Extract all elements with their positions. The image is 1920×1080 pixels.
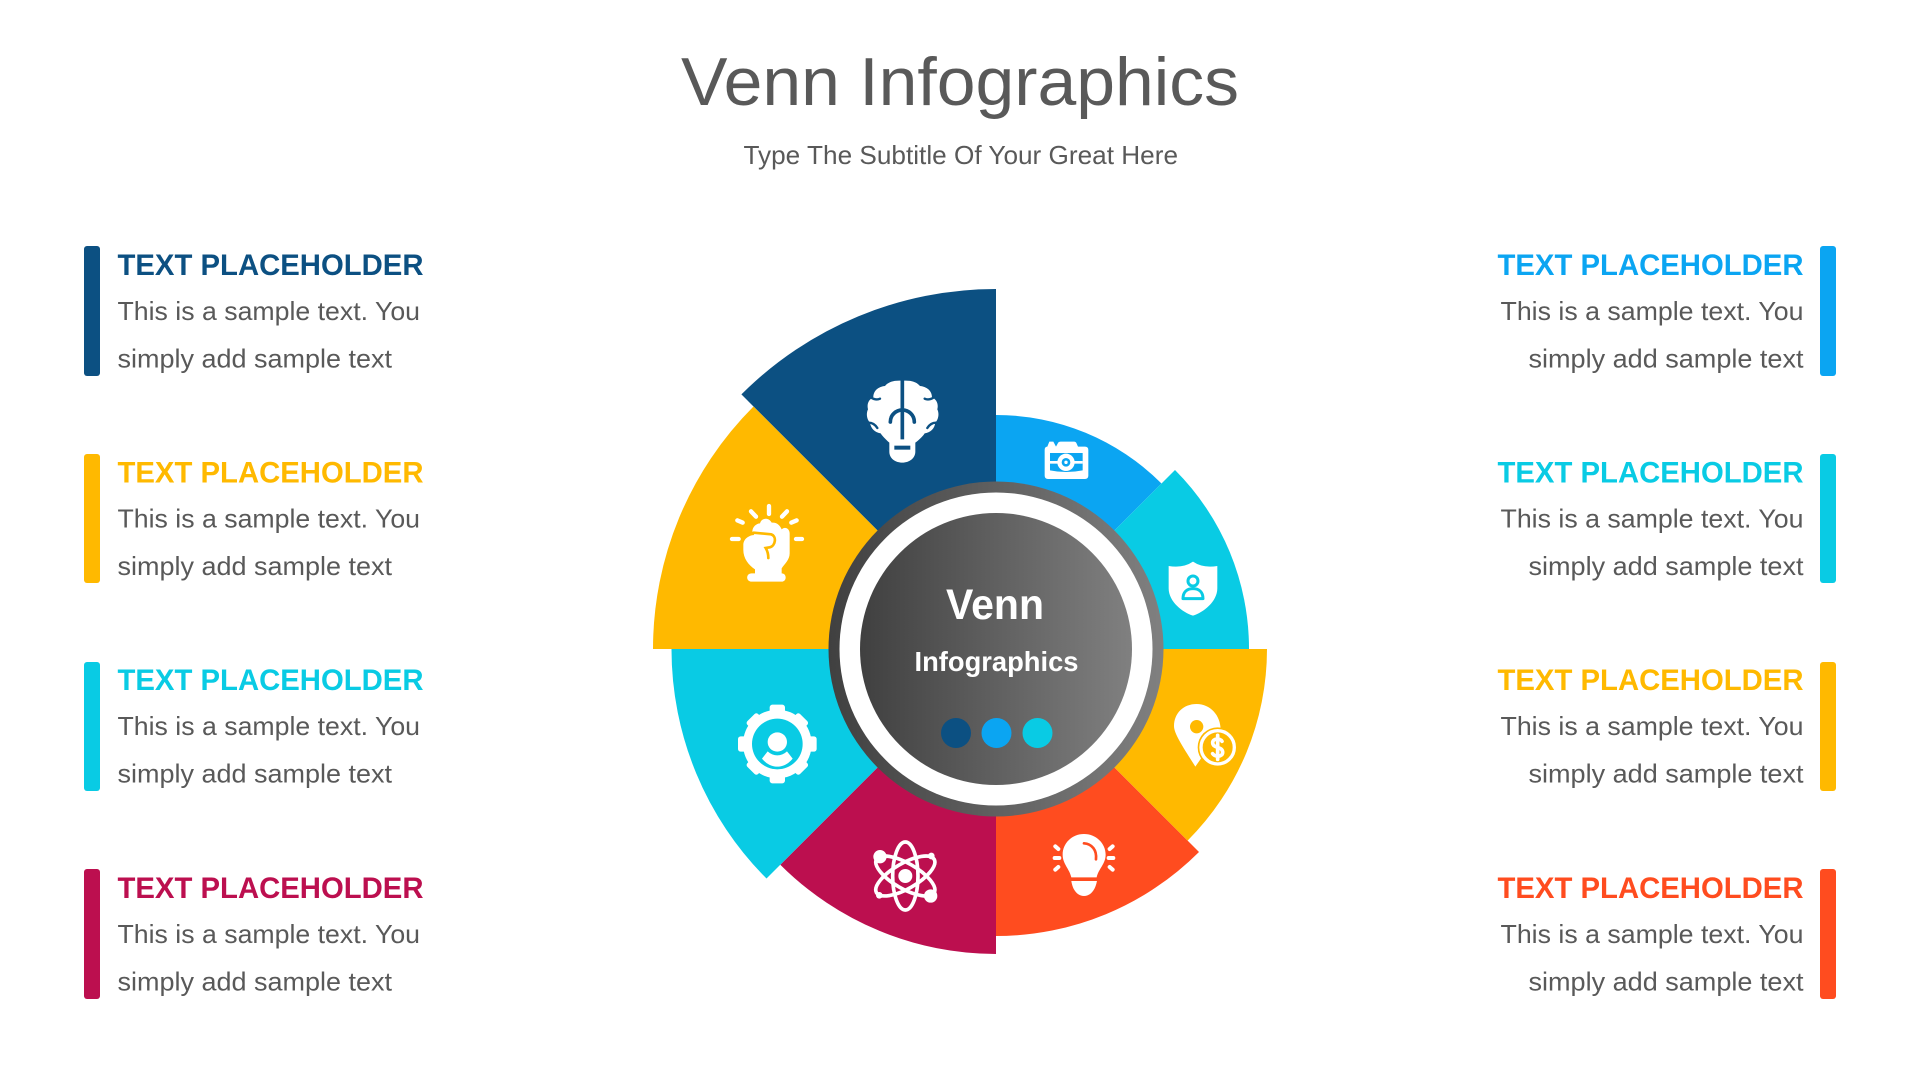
panel: right item 3: TEXT PLACEHOLDER <box>1498 664 1804 697</box>
wedge: cyan right <box>996 470 1249 649</box>
icon: camera <box>1045 442 1088 479</box>
panel: left item 4: This is a sample text. You <box>118 919 420 949</box>
wedge: orange <box>996 649 1199 936</box>
wedge: navy <box>741 289 996 649</box>
hub title: Venn <box>946 581 1044 629</box>
panel: left item 4 <box>84 869 424 999</box>
wedge: blue <box>996 415 1162 649</box>
panel: right item 4: This is a sample text. You <box>1500 919 1804 949</box>
panel: right item 3 <box>1498 662 1836 791</box>
icon: raised fist <box>732 506 802 582</box>
panel: left item 2: TEXT PLACEHOLDER <box>118 456 424 490</box>
subtitle: Type The Subtitle Of Your Great Here <box>744 140 1178 170</box>
wedge: yellow right <box>996 649 1267 841</box>
panel: right item 2: TEXT PLACEHOLDER <box>1498 456 1804 490</box>
icon: brain with bulb <box>867 380 938 463</box>
icon: shield with person <box>1169 562 1217 616</box>
centre hub <box>828 482 1164 816</box>
panel: right item 1: simply add sample text <box>1528 344 1804 374</box>
inner disc <box>860 513 1132 785</box>
panel: right item 3: This is a sample text. You <box>1500 711 1804 741</box>
panel: left item 4: TEXT PLACEHOLDER <box>118 872 424 905</box>
wedge: crimson <box>780 649 996 954</box>
icon: gear with person <box>738 705 817 783</box>
white ring <box>840 492 1152 806</box>
panel: right item 1: TEXT PLACEHOLDER <box>1498 249 1804 282</box>
dots <box>941 718 1052 748</box>
panel: right item 1 <box>1498 246 1836 376</box>
panel: left item 1: simply add sample text <box>118 344 393 374</box>
panel: left item 3: TEXT PLACEHOLDER <box>118 664 424 697</box>
icon: atom <box>870 842 941 910</box>
panel: left item 2: This is a sample text. You <box>118 504 420 534</box>
icon: light bulb <box>1055 834 1113 896</box>
panel: left item 3: This is a sample text. You <box>118 711 420 741</box>
panel: right item 4: TEXT PLACEHOLDER <box>1498 872 1804 905</box>
panel: right item 3: simply add sample text <box>1528 758 1804 788</box>
panel: left item 1 <box>84 246 424 376</box>
hub subtitle: Infographics <box>914 646 1078 677</box>
panel: left item 1: This is a sample text. You <box>118 296 420 326</box>
icon: location pin with dollar coin <box>1174 704 1238 767</box>
panel: left item 3 <box>84 662 424 791</box>
title: Venn Infographics <box>681 44 1239 120</box>
chart: radial wedge diagram <box>653 289 1267 954</box>
wedge: cyan left <box>672 649 996 878</box>
panel: left item 3: simply add sample text <box>118 758 393 788</box>
outer ring <box>828 482 1164 816</box>
panel: right item 2: This is a sample text. You <box>1500 504 1804 534</box>
panel: left item 1: TEXT PLACEHOLDER <box>118 249 424 282</box>
panel: right item 4 <box>1498 869 1836 999</box>
panel: left item 2: simply add sample text <box>118 551 393 581</box>
panel: left item 2 <box>84 454 424 583</box>
wedge: yellow left <box>653 406 996 649</box>
panel: right item 2: simply add sample text <box>1528 551 1804 581</box>
panel: right item 2 <box>1498 454 1836 583</box>
panel: right item 4: simply add sample text <box>1528 966 1804 996</box>
panel: right item 1: This is a sample text. You <box>1500 296 1804 326</box>
panel: left item 4: simply add sample text <box>118 966 393 996</box>
